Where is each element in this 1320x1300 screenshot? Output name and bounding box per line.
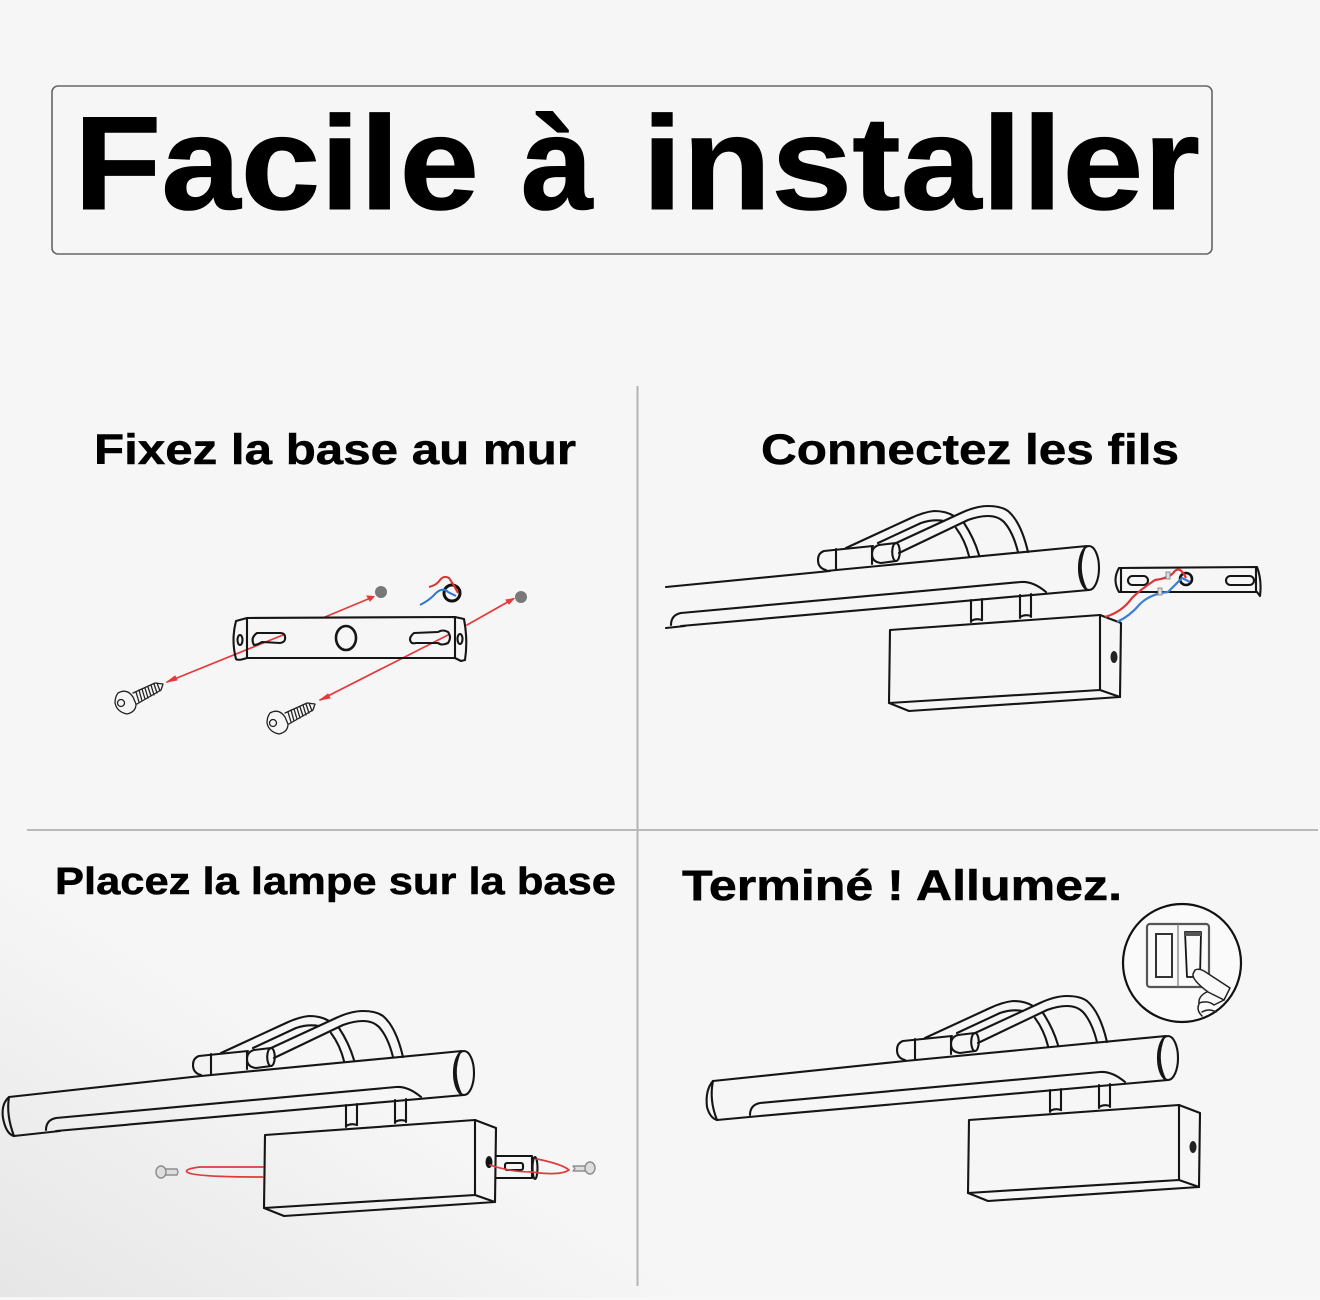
illustration: lamp on base (3, 1011, 595, 1216)
illustration: finished lamp (707, 996, 1200, 1201)
panel: step 1 fix the base (94, 426, 576, 734)
title: installer (642, 90, 1200, 238)
heading: step 3: Placez la lampe sur la base (55, 861, 616, 903)
title: à (521, 90, 594, 238)
icon: small screw (573, 1162, 595, 1174)
heading: step 2: Connectez les fils (761, 426, 1179, 474)
panel: step 2 connect the wires (666, 426, 1261, 711)
heading: step 1: Fixez la base au mur (94, 426, 576, 474)
wall bracket (1116, 567, 1261, 596)
panel: step 3 place the lamp (3, 861, 616, 1216)
illustration: lamp with wires (666, 506, 1261, 711)
heading: step 4: Terminé ! Allumez. (682, 862, 1122, 910)
title box (52, 86, 1212, 254)
icon: switch in circle (1123, 904, 1241, 1022)
title (74, 90, 1200, 238)
title: Facile (74, 90, 479, 238)
icon: screw (115, 683, 163, 714)
panel: step 4 finished (682, 862, 1241, 1201)
icon: small screw (156, 1166, 178, 1178)
icon: wires (420, 577, 460, 605)
illustration: bracket with screws (115, 577, 527, 734)
icon: screw (267, 703, 315, 734)
